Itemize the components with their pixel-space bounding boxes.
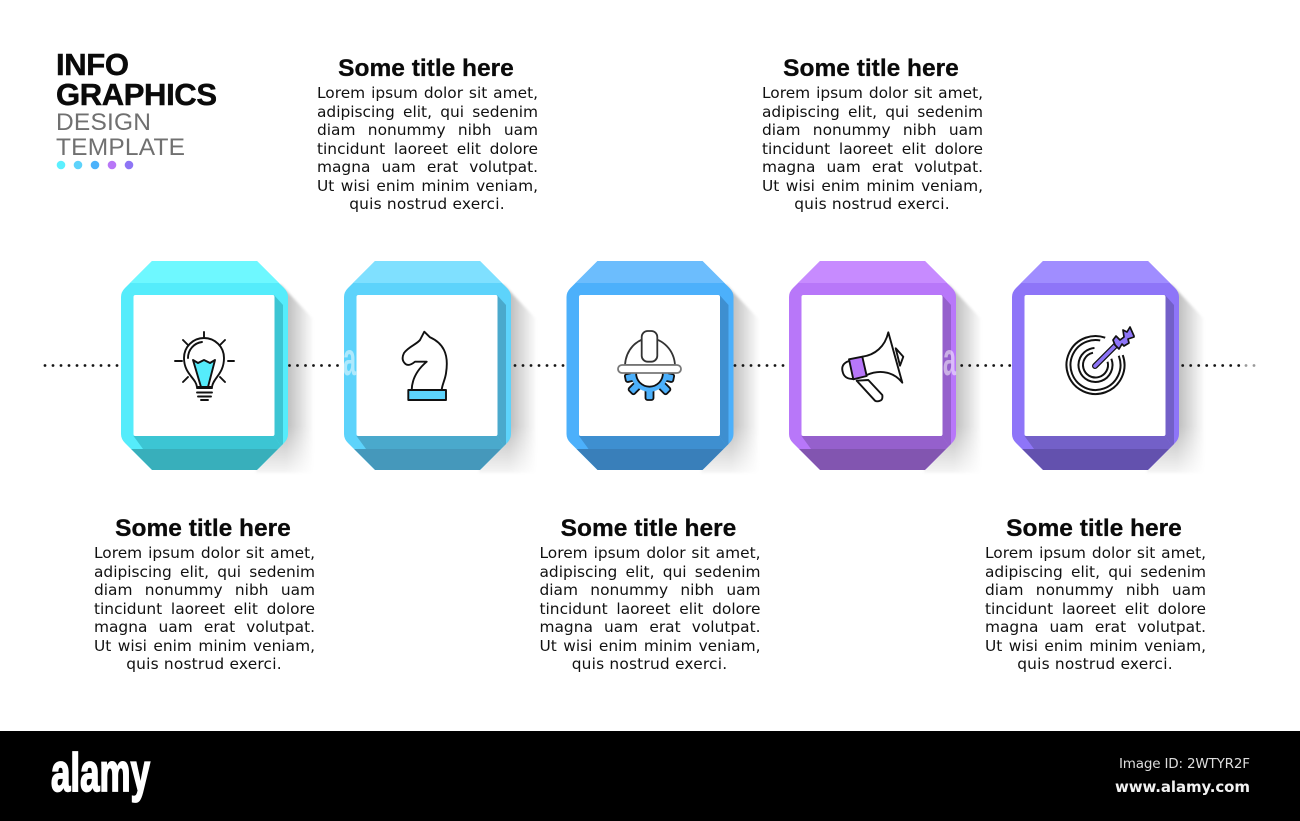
text block: top 2: adipiscing elit, qui sedenim xyxy=(762,103,983,121)
text block: bottom 2: Ut wisi enim minim veniam, xyxy=(540,637,760,655)
text block: top 1: diam nonummy nibh uam xyxy=(317,121,538,139)
image id: Image ID: 2WTYR2F xyxy=(1119,756,1250,772)
heading colour dots xyxy=(57,161,133,169)
text block: bottom 2: quis nostrud exerci. xyxy=(572,655,727,673)
card 2: chess knight xyxy=(344,261,546,477)
card 3: helmet and gear xyxy=(566,261,768,477)
text block: bottom 1 xyxy=(94,515,315,673)
text block: bottom 2: tincidunt laoreet elit dolore xyxy=(540,600,760,618)
text block: bottom 2: Some title here xyxy=(561,515,736,542)
title: infographics design template: GRAPHICS xyxy=(56,77,217,112)
text block: top 1: Lorem ipsum dolor sit amet, xyxy=(317,84,538,102)
text block: bottom 3: Some title here xyxy=(1006,515,1182,542)
text block: bottom 1: magna uam erat volutpat. xyxy=(94,618,315,636)
dotted timeline xyxy=(45,364,1255,367)
text block: bottom 3: Ut wisi enim minim veniam, xyxy=(985,637,1206,655)
icon: megaphone xyxy=(842,332,903,401)
card 4: megaphone xyxy=(789,261,991,477)
text block: bottom 3: quis nostrud exerci. xyxy=(1017,655,1173,673)
text block: top 1: adipiscing elit, qui sedenim xyxy=(317,103,538,121)
text block: bottom 1: Lorem ipsum dolor sit amet, xyxy=(94,544,315,562)
text block: top 1: Ut wisi enim minim veniam, xyxy=(317,177,538,195)
text block: top 2: quis nostrud exerci. xyxy=(794,195,950,213)
watermark fragments xyxy=(343,333,956,385)
text block: top 2: Ut wisi enim minim veniam, xyxy=(762,177,983,195)
text block: bottom 2 xyxy=(540,515,760,673)
text block: bottom 2: diam nonummy nibh uam xyxy=(540,581,760,599)
text block: top 2: Lorem ipsum dolor sit amet, xyxy=(762,84,983,102)
icon: helmet and gear xyxy=(618,331,681,400)
text block: top 2: tincidunt laoreet elit dolore xyxy=(762,140,983,158)
text block: bottom 2: adipiscing elit, qui sedenim xyxy=(540,563,760,581)
text block: top 2: magna uam erat volutpat. xyxy=(762,158,983,176)
title: infographics design template: DESIGN xyxy=(56,109,151,136)
text block: bottom 2: Lorem ipsum dolor sit amet, xyxy=(540,544,760,562)
text block: top 2 xyxy=(762,55,983,213)
text block: bottom 1: tincidunt laoreet elit dolore xyxy=(94,600,315,618)
title: infographics design template: TEMPLATE xyxy=(56,134,185,161)
text block: bottom 3 xyxy=(985,515,1206,673)
icon: chess knight xyxy=(403,332,447,400)
logo: alamy: alamy xyxy=(51,743,150,803)
text block: bottom 3: tincidunt laoreet elit dolore xyxy=(985,600,1206,618)
text block: bottom 3: magna uam erat volutpat. xyxy=(985,618,1206,636)
title: infographics design template xyxy=(56,47,217,161)
text block: top 1: tincidunt laoreet elit dolore xyxy=(317,140,538,158)
text block: bottom 3: adipiscing elit, qui sedenim xyxy=(985,563,1206,581)
card 1: light bulb xyxy=(121,261,323,477)
text block: bottom 3: Lorem ipsum dolor sit amet, xyxy=(985,544,1206,562)
watermark fragments: a xyxy=(943,333,956,385)
text block: bottom 2: magna uam erat volutpat. xyxy=(540,618,760,636)
text block: top 1: Some title here xyxy=(338,55,514,82)
watermark fragments: a xyxy=(343,333,356,385)
text block: bottom 1: Ut wisi enim minim veniam, xyxy=(94,637,315,655)
text block: bottom 1: quis nostrud exerci. xyxy=(126,655,282,673)
text block: bottom 1: adipiscing elit, qui sedenim xyxy=(94,563,315,581)
website: www.alamy.com xyxy=(1115,778,1250,796)
title: infographics design template: INFO xyxy=(56,47,129,82)
card 5: target xyxy=(1012,261,1214,477)
text block: top 1 xyxy=(317,55,538,213)
icon: light bulb xyxy=(175,332,234,400)
text block: bottom 3: diam nonummy nibh uam xyxy=(985,581,1206,599)
text block: top 2: diam nonummy nibh uam xyxy=(762,121,983,139)
text block: bottom 1: diam nonummy nibh uam xyxy=(94,581,315,599)
text block: top 1: magna uam erat volutpat. xyxy=(317,158,538,176)
text block: top 1: quis nostrud exerci. xyxy=(349,195,505,213)
text block: bottom 1: Some title here xyxy=(115,515,291,542)
footer bar xyxy=(0,731,1300,821)
icon: target with arrow xyxy=(1058,327,1134,402)
text block: top 2: Some title here xyxy=(783,55,959,82)
